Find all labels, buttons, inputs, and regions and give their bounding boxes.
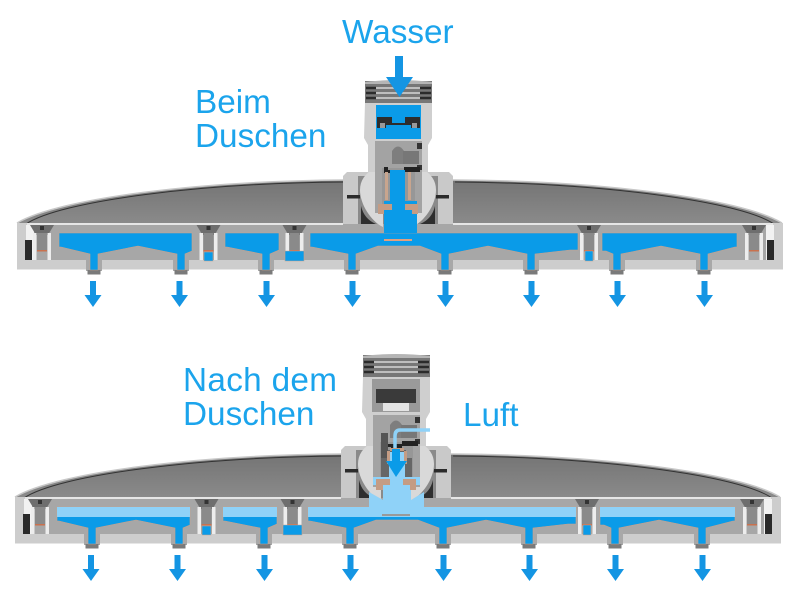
valve air section (369, 379, 430, 516)
label: Luft: Luft (463, 397, 519, 434)
heading: Wasser: Wasser (342, 14, 454, 51)
light water layer (57, 507, 735, 517)
heading: Beim Duschen: Beim (195, 84, 271, 121)
arrow: water inflow (386, 56, 413, 97)
heading: Nach dem Duschen (183, 362, 337, 433)
heading: Beim Duschen: Duschen (195, 118, 326, 155)
water in chambers (59, 233, 737, 270)
arrows: water outflow bottom (82, 555, 711, 581)
draining water in chambers (57, 507, 735, 544)
diagram: shower head during showering (17, 80, 783, 274)
water in valve (376, 105, 421, 241)
heading: Beim Duschen (195, 84, 326, 155)
diagram: shower head after showering (15, 354, 781, 548)
heading: Nach dem Duschen: Nach dem (183, 362, 337, 399)
arrows: water outflow top (84, 281, 713, 307)
heading: Nach dem Duschen: Duschen (183, 396, 314, 433)
